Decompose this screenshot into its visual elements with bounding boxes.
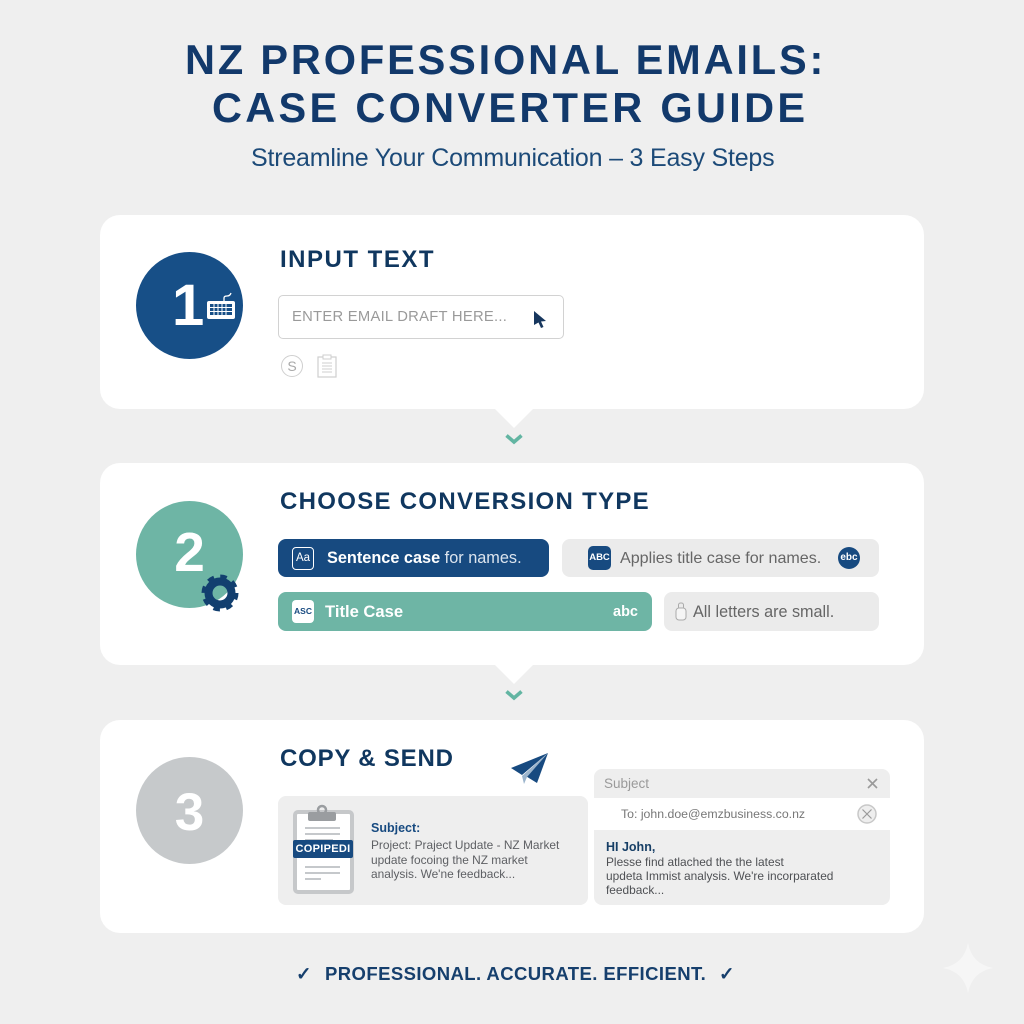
icon: abc badge (838, 547, 860, 569)
icon: keyboard (207, 292, 235, 319)
option: title case (278, 592, 652, 631)
label: abc: abc (613, 604, 638, 620)
heading: copy & send: COPY & SEND (280, 745, 454, 772)
panel: step 3 (100, 720, 924, 933)
icon: circled close (857, 804, 877, 824)
to line: To: john.doe@emzbusiness.co.nz (621, 807, 805, 821)
body text: Project: Praject Update - NZ Market (371, 838, 559, 852)
icon: ABC (588, 546, 611, 570)
footer tagline: ✓ (296, 963, 312, 984)
copied label: COPIPEDI (296, 843, 350, 855)
icon: dollar: S (287, 358, 297, 374)
icon: lock (676, 602, 686, 620)
icon: clipboard copied (293, 804, 354, 894)
subject text: Subject: (371, 821, 420, 835)
step 2 badge: 2 (174, 521, 205, 583)
body text: update focoing the NZ market (371, 852, 528, 866)
icon: dollar (281, 355, 303, 377)
icon: gear (202, 574, 238, 612)
icon: Aa: Aa (296, 552, 310, 564)
icon: ASC: ASC (294, 606, 312, 616)
option: sentence case (278, 539, 549, 577)
email window (594, 769, 890, 905)
label: sentence case: Sentence case for names. (327, 549, 522, 567)
step 1 badge (136, 252, 243, 359)
placeholder text: ENTER EMAIL DRAFT HERE... (292, 309, 507, 325)
label: applies title case: Applies title case for names. (620, 549, 821, 567)
email text: Plesse find atlached the the latest (606, 855, 784, 869)
title (185, 36, 826, 131)
label: subject: Subject (604, 776, 649, 791)
body text (371, 838, 560, 881)
footer tagline: PROFESSIONAL. ACCURATE. EFFICIENT. (325, 963, 706, 984)
icon: sparkle (943, 943, 993, 993)
copied label (293, 840, 353, 858)
icon: close (868, 778, 878, 788)
title: NZ PROFESSIONAL EMAILS: (185, 36, 826, 83)
footer tagline: ✓ (719, 963, 735, 984)
option: lowercase (664, 592, 879, 631)
heading: choose conversion type: CHOOSE CONVERSION TYPE (280, 488, 650, 515)
icon: paper plane (511, 753, 548, 784)
option: applies title case (562, 539, 879, 577)
panel: step 1 (100, 215, 924, 409)
icon: ABC: ABC (589, 552, 610, 563)
icon: clipboard (317, 354, 337, 378)
copied preview panel (278, 796, 588, 905)
step 1 badge: 1 (172, 273, 204, 338)
icon: abc badge: ebc (840, 552, 858, 563)
icon: Aa (292, 547, 314, 570)
heading: input text: INPUT TEXT (280, 246, 435, 273)
email text: feedback... (606, 883, 664, 897)
label: all letters small: All letters are small. (693, 603, 834, 621)
subtitle: Streamline Your Communication – 3 Easy Steps (251, 144, 774, 172)
input box (278, 295, 564, 339)
label: title case: Title Case (325, 602, 403, 621)
step 2 badge (136, 501, 243, 608)
body text: analysis. We'ne feedback... (371, 867, 515, 881)
panel: step 2 (100, 463, 924, 665)
email body (594, 830, 890, 905)
step 3 badge (136, 757, 243, 864)
email header (594, 769, 890, 798)
greeting: HI John, (606, 840, 655, 854)
chevron 2 (505, 690, 523, 700)
icon: cursor (534, 311, 546, 328)
email text (606, 855, 833, 897)
email text: updeta Immist analysis. We're incorparated (606, 869, 833, 883)
step 3 badge: 3 (175, 783, 204, 842)
icon: ASC (292, 600, 314, 623)
chevron 1 (505, 434, 523, 444)
title: CASE CONVERTER GUIDE (212, 84, 808, 131)
